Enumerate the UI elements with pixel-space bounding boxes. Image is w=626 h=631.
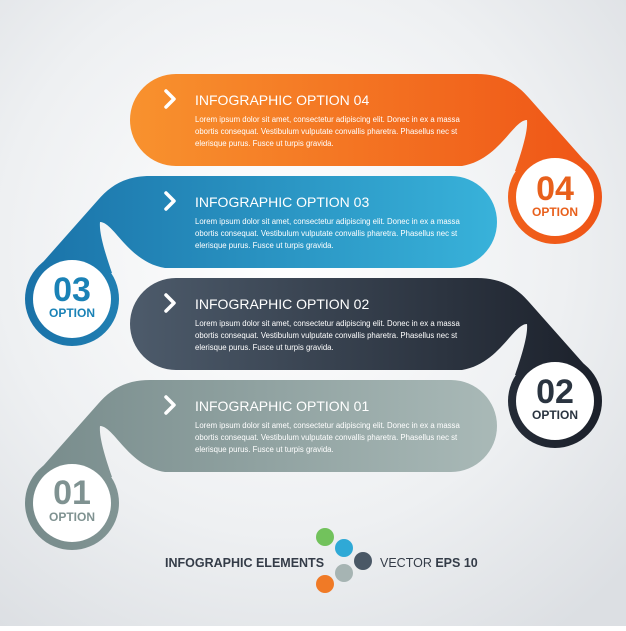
text block: option 03 bbox=[195, 194, 460, 250]
badge: 02 bbox=[516, 362, 594, 440]
panel: option 04 bbox=[130, 74, 602, 244]
text block: option 03: obortis consequat. Vestibulum vulputate convallis pharetra. Phasellus nec st bbox=[195, 229, 458, 238]
text block: option 01: Lorem ipsum dolor sit amet, consectetur adipiscing elit. Donec in ex a massa bbox=[195, 421, 460, 430]
footer title: INFOGRAPHIC ELEMENTS bbox=[165, 556, 324, 570]
text block: option 04: obortis consequat. Vestibulum vulputate convallis pharetra. Phasellus nec st bbox=[195, 127, 458, 136]
text block: option 03: elerisque purus. Fusce ut turpis gravida. bbox=[195, 241, 334, 250]
text block: option 01: elerisque purus. Fusce ut turpis gravida. bbox=[195, 445, 334, 454]
text block: option 04: elerisque purus. Fusce ut turpis gravida. bbox=[195, 139, 334, 148]
badge: 02: 02 bbox=[536, 373, 574, 411]
badge: 04 bbox=[516, 158, 594, 236]
footer subtitle: VECTOR EPS 10 bbox=[380, 556, 478, 570]
panel: option 02 bbox=[130, 278, 602, 448]
text block: option 01: INFOGRAPHIC OPTION 01 bbox=[195, 398, 369, 414]
text block: option 03: Lorem ipsum dolor sit amet, consectetur adipiscing elit. Donec in ex a massa bbox=[195, 217, 460, 226]
text block: option 01: obortis consequat. Vestibulum vulputate convallis pharetra. Phasellus nec st bbox=[195, 433, 458, 442]
icon: chevron bbox=[166, 397, 174, 413]
text block: option 04 bbox=[195, 92, 460, 148]
text block: option 04: Lorem ipsum dolor sit amet, consectetur adipiscing elit. Donec in ex a massa bbox=[195, 115, 460, 124]
badge: 04: 04 bbox=[536, 170, 574, 208]
text block: option 03: INFOGRAPHIC OPTION 03 bbox=[195, 194, 369, 210]
badge: 02: OPTION bbox=[532, 408, 578, 422]
text block: option 01 bbox=[195, 398, 460, 454]
panel: option 01 bbox=[25, 380, 497, 550]
text block: option 02: Lorem ipsum dolor sit amet, consectetur adipiscing elit. Donec in ex a massa bbox=[195, 319, 460, 328]
icon: dots bbox=[316, 528, 372, 593]
badge: 03 bbox=[33, 260, 111, 338]
badge: 01 bbox=[33, 464, 111, 542]
badge: 01: 01 bbox=[53, 474, 91, 512]
text block: option 02: elerisque purus. Fusce ut turpis gravida. bbox=[195, 343, 334, 352]
badge: 04: OPTION bbox=[532, 205, 578, 219]
text block: option 02: obortis consequat. Vestibulum vulputate convallis pharetra. Phasellus nec st bbox=[195, 331, 458, 340]
text block: option 02: INFOGRAPHIC OPTION 02 bbox=[195, 296, 369, 312]
icon: chevron bbox=[166, 91, 174, 107]
panel: option 03 bbox=[25, 176, 497, 346]
text block: option 04: INFOGRAPHIC OPTION 04 bbox=[195, 92, 369, 108]
badge: 03: OPTION bbox=[49, 306, 95, 320]
icon: chevron bbox=[166, 295, 174, 311]
badge: 03: 03 bbox=[53, 271, 91, 309]
icon: chevron bbox=[166, 193, 174, 209]
badge: 01: OPTION bbox=[49, 510, 95, 524]
text block: option 02 bbox=[195, 296, 460, 352]
